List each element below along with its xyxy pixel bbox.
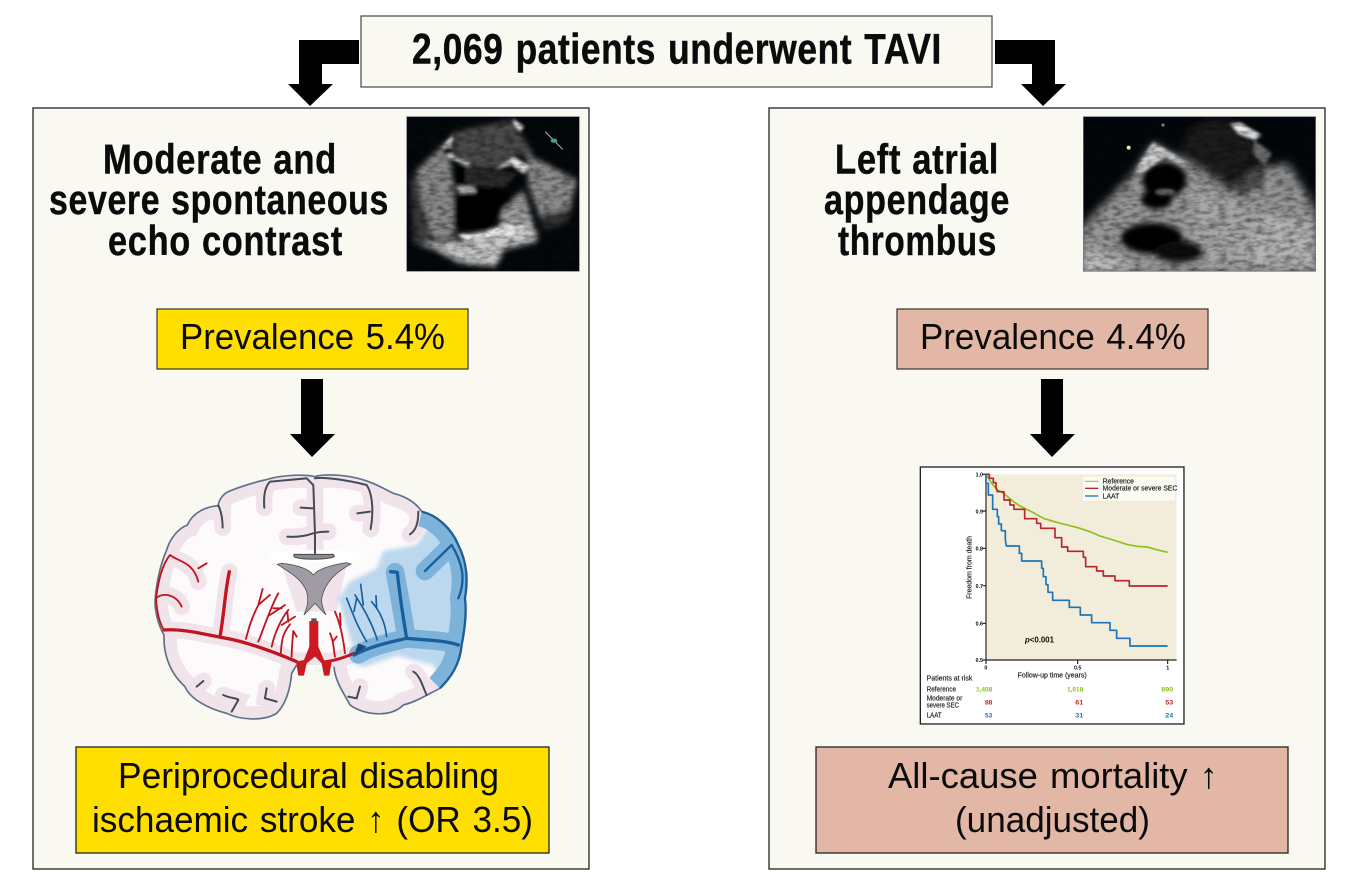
axis labels: 0.5 [976,658,983,664]
axis labels: 1.0 [976,473,983,479]
heading: LAA thrombus: thrombus [838,217,997,264]
axis labels: 0.5 [1074,666,1081,672]
axis labels: 1 [1166,666,1169,672]
cortical outline [155,475,440,719]
axis labels: 0.7 [976,584,983,590]
axis labels [967,473,1169,679]
axis labels: 0.8 [976,547,983,553]
cortex and white matter [158,476,439,718]
axis labels: Freedom from death [967,536,974,599]
arrow: prevalence to survival chart [1030,379,1075,457]
infarct territory [336,512,466,688]
patients at risk table [927,675,1174,719]
outcome box: stroke: ischaemic stroke ↑ (OR 3.5) [92,799,533,840]
patients at risk table: LAAT [927,712,942,719]
patients at risk table: 88 [985,699,993,706]
axis labels: 0.9 [976,509,983,515]
legend: Reference [1103,478,1134,485]
axis labels: 0 [984,666,987,672]
panel: spontaneous echo contrast [33,108,589,869]
blue cortical margin [422,512,467,688]
heading: moderate and severe SEC: severe spontaneous [49,176,389,223]
outcome box: mortality: (unadjusted) [955,799,1150,840]
patients at risk table: 1,408 [976,687,993,694]
patients at risk table: 1,018 [1067,687,1084,694]
heading: moderate and severe SEC [49,136,389,264]
axis labels: Follow-up time (years) [1018,672,1087,679]
patients at risk table: 24 [1165,712,1174,719]
outcome box: stroke [76,747,549,853]
heading: LAA thrombus [824,136,1010,264]
legend [1083,477,1177,501]
arrow: prevalence to stroke [290,379,335,457]
outcome box: stroke: Periprocedural disabling [118,755,499,796]
brain illustration [155,475,477,719]
prevalence box 5.4% [157,309,468,369]
heading: LAA thrombus: Left atrial [835,136,999,182]
survival curves [986,474,1168,646]
blue arteries [347,545,463,655]
patients at risk table: severe SEC [927,702,959,709]
axis labels: 0.6 [976,622,983,628]
legend: LAAT [1103,493,1120,500]
heading: LAA thrombus: appendage [824,176,1010,223]
title box [361,16,992,87]
red arteries [156,555,354,662]
patients at risk table: 61 [1075,699,1084,706]
ventricles [277,563,351,615]
heading: moderate and severe SEC: Moderate and [103,136,337,182]
panel: left atrial appendage thrombus [769,108,1325,869]
patients at risk table: Moderate or [927,695,963,702]
p value: p<0.001 [1024,636,1055,645]
patients at risk table: Patients at risk [927,675,973,682]
echocardiogram image: thrombus [1078,117,1322,277]
patients at risk table: 53 [1165,699,1174,706]
title box: 2,069 patients underwent TAVI [412,26,942,74]
prevalence box 4.4% [897,309,1208,369]
arrow: title to left panel [288,40,359,106]
legend: Moderate or severe SEC [1103,486,1177,493]
patients at risk table: 31 [1075,712,1084,719]
patients at risk table: 890 [1161,687,1174,694]
outcome box: mortality [816,747,1288,853]
outcome box: mortality: All-cause mortality ↑ [888,755,1218,796]
patients at risk table: Reference [927,687,956,694]
echocardiogram image: SEC [407,117,579,271]
prevalence box 5.4%: Prevalence 5.4% [180,316,445,357]
arrow: title to right panel [995,40,1066,106]
Kaplan-Meier chart [920,467,1184,724]
patients at risk table: 53 [985,712,993,719]
prevalence box 4.4%: Prevalence 4.4% [920,316,1186,357]
heading: moderate and severe SEC: echo contrast [108,217,343,264]
sulci [197,478,427,712]
